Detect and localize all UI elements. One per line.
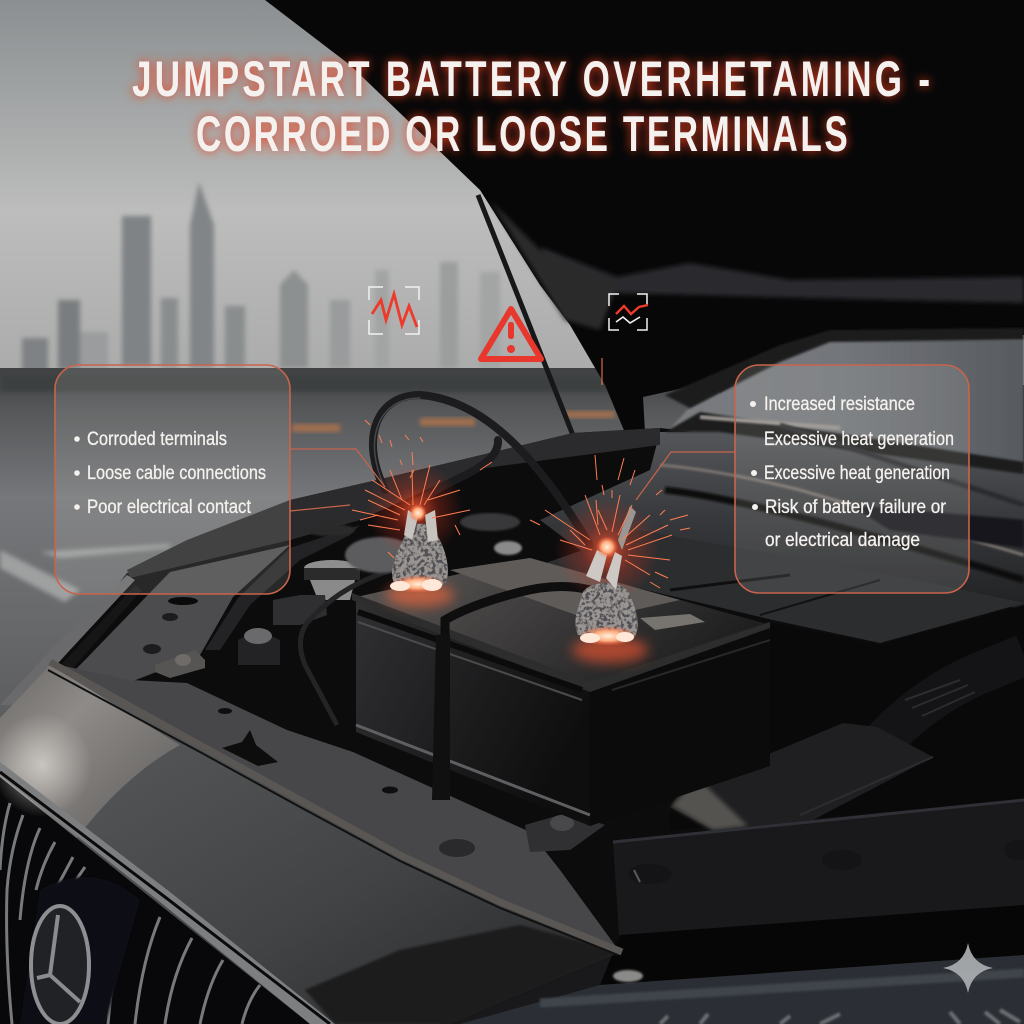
icon: dual trend lines — [609, 294, 648, 330]
engine cover right — [540, 530, 1024, 830]
open hood underside — [265, 0, 1024, 440]
left terminal glow — [367, 462, 463, 558]
effects bullet list: Increased resistance — [764, 394, 915, 415]
cowl plate — [50, 663, 620, 952]
jumper cable — [373, 395, 590, 545]
battery — [352, 558, 770, 826]
reflected glow on battery top — [386, 583, 648, 663]
effects bullet list: Excessive heat generation — [764, 429, 954, 450]
icon: sparkle watermark — [943, 943, 993, 993]
city skyline — [22, 182, 500, 374]
right terminal glow — [555, 498, 659, 602]
right lower panel — [440, 800, 1024, 1024]
callout panel: effects — [735, 365, 969, 593]
wiper cowl and reflections — [540, 412, 1024, 610]
title — [132, 52, 930, 163]
sparks: right terminal — [530, 358, 690, 588]
icon: warning triangle — [481, 309, 541, 359]
background: hazy sky — [0, 0, 1024, 385]
effects bullet list: Excessive heat generation — [764, 463, 950, 484]
front grille — [0, 778, 310, 1024]
road and barrier — [0, 368, 720, 738]
connector line: left panel to left terminal — [290, 449, 385, 511]
effects bullet list: Risk of battery failure or — [765, 497, 947, 518]
title: CORROED OR LOOSE TERMINALS — [196, 107, 848, 163]
causes bullet list: Poor electrical contact — [87, 497, 252, 518]
air intake hose — [880, 655, 1024, 745]
right corroded terminal — [575, 506, 638, 646]
hood strut — [478, 195, 578, 448]
left corroded terminal — [390, 504, 448, 593]
small cowl bolts and latch — [218, 708, 605, 857]
engine bay base — [0, 428, 1024, 1024]
effects bullet list: or electrical damage — [765, 530, 920, 551]
intake box — [670, 723, 933, 830]
icon: pulse waveform — [369, 287, 419, 334]
effects bullet list — [750, 394, 954, 551]
engine compartment left parts — [30, 513, 522, 725]
sparks: left terminal — [352, 420, 492, 558]
causes bullet list — [74, 429, 266, 518]
causes bullet list: Corroded terminals — [87, 429, 227, 450]
front hood panel — [0, 662, 622, 1024]
fender edge — [0, 428, 660, 712]
title: JUMPSTART BATTERY OVERHETAMING - — [132, 52, 930, 108]
battery hold-down strap — [445, 586, 590, 660]
connector line: right panel to right terminal — [636, 452, 735, 500]
causes bullet list: Loose cable connections — [87, 463, 266, 484]
windshield area — [660, 340, 1024, 490]
callout panel: causes — [55, 365, 290, 594]
vertical strap — [432, 635, 450, 800]
grille emblem — [20, 877, 140, 1024]
